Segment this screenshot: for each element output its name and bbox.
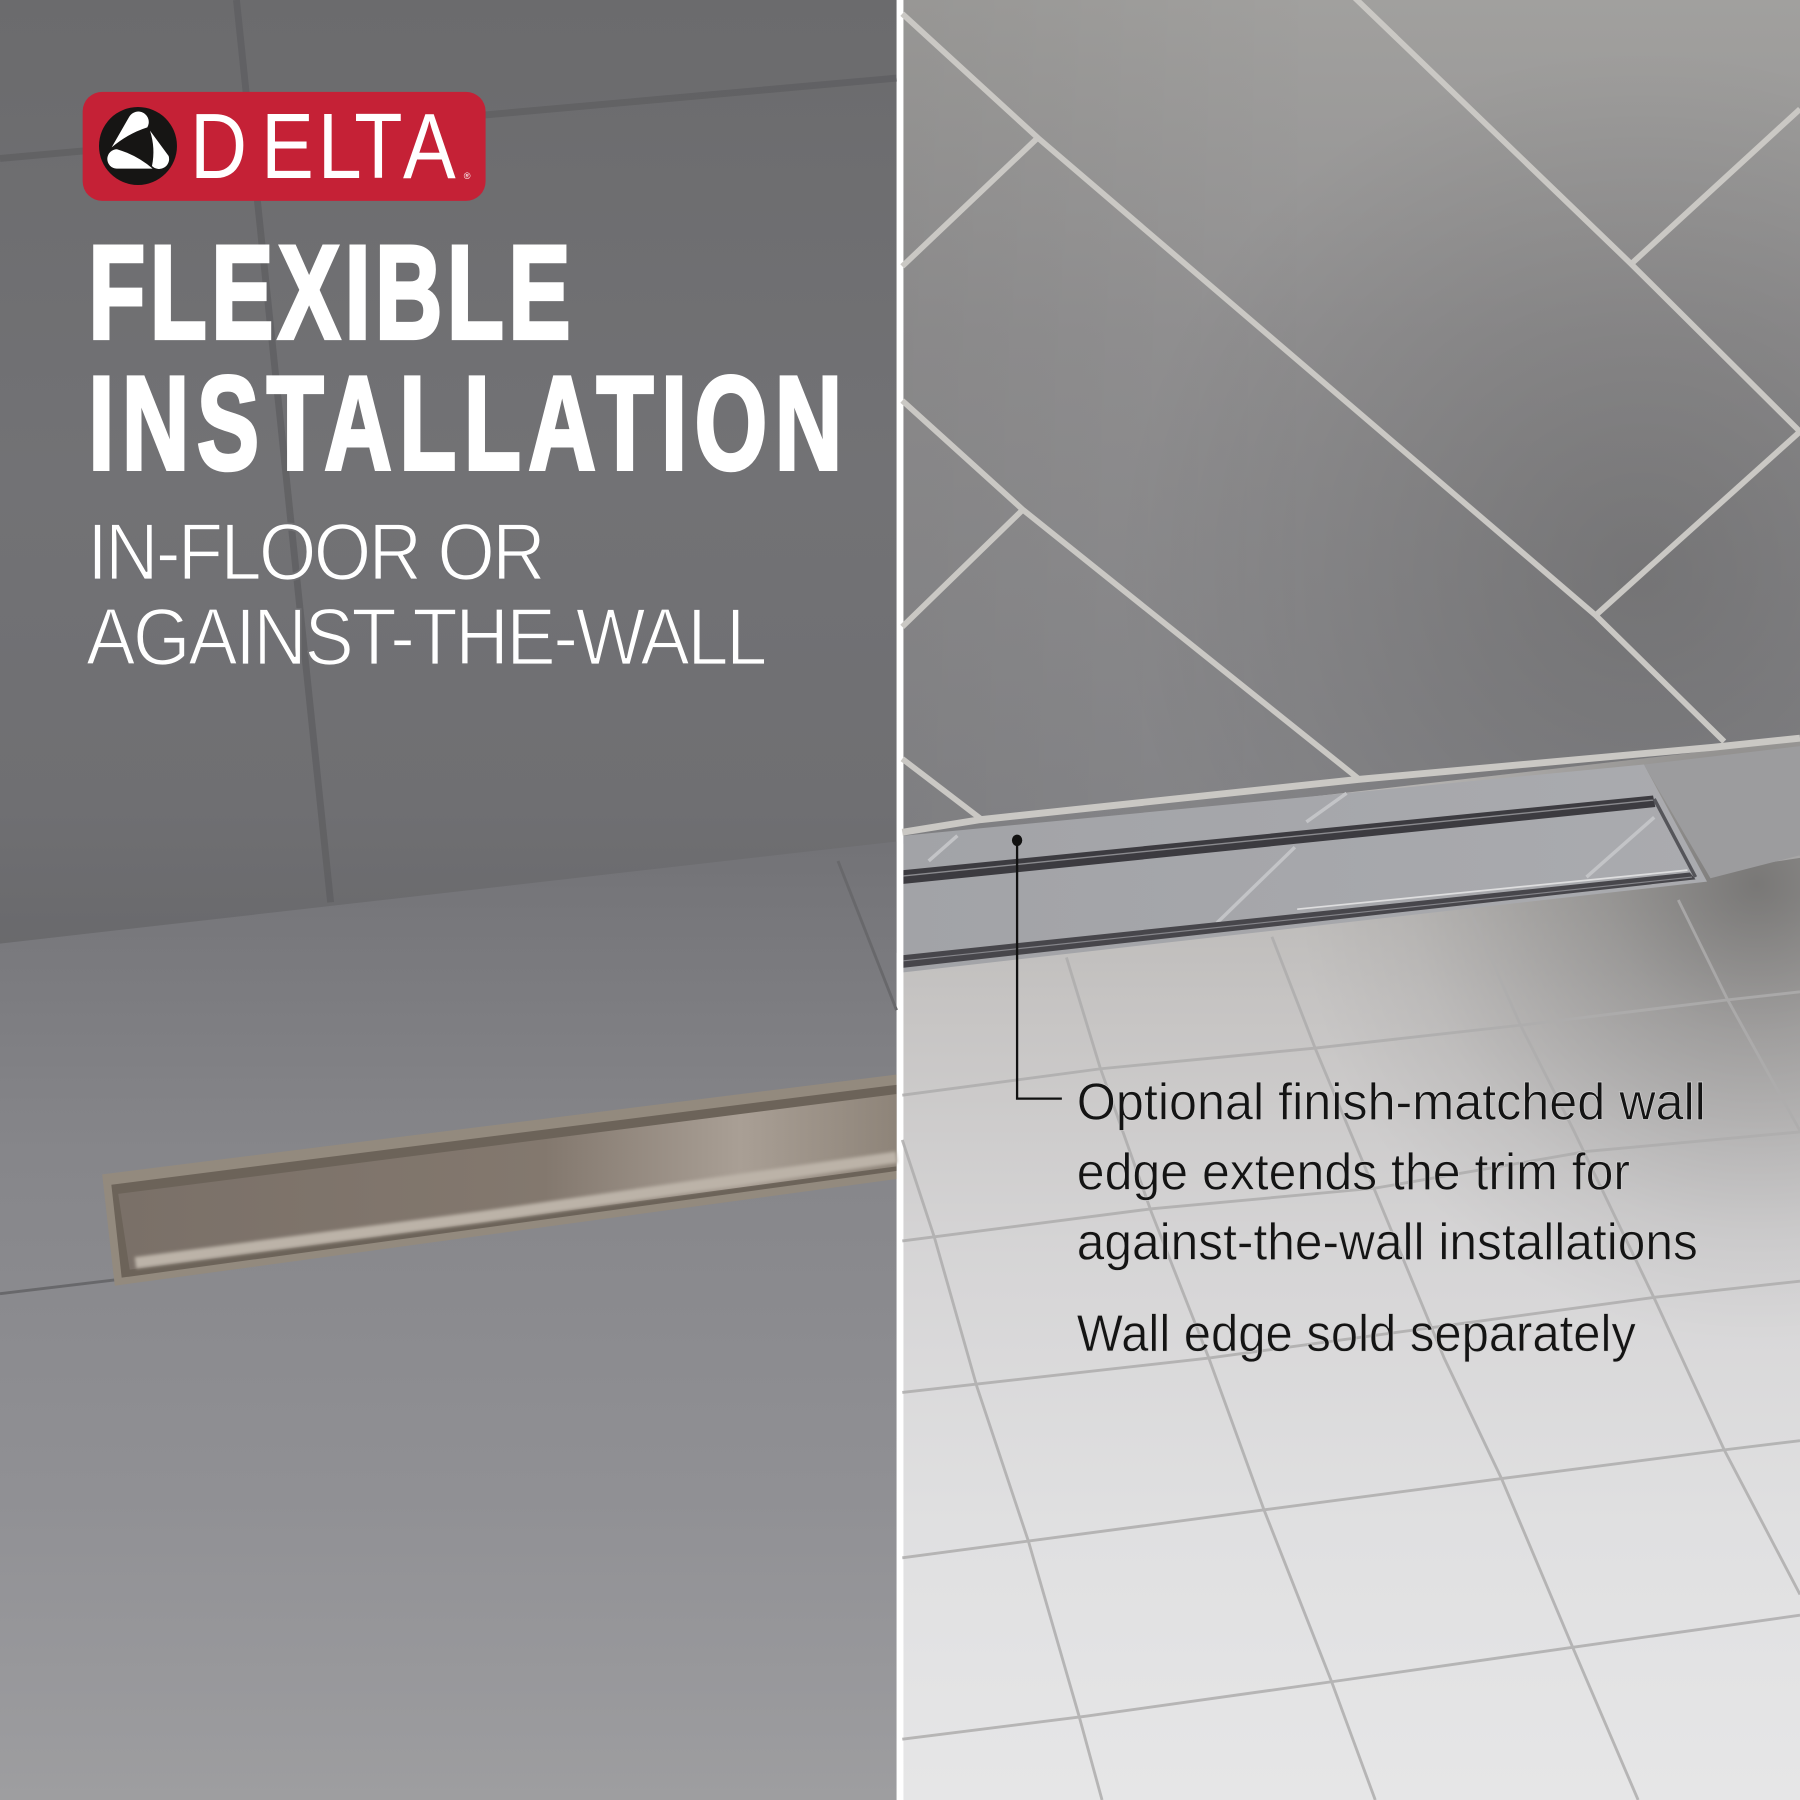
shower floor tile	[0, 841, 897, 1800]
shower wall tile	[0, 0, 897, 953]
subheading: in-floor or against-the-wall: IN-FLOOR OR	[87, 508, 546, 597]
logo emblem	[99, 107, 177, 185]
callout text: Wall edge sold separately	[1077, 1304, 1636, 1362]
panel: in-floor installation photo	[0, 0, 897, 1800]
chrome linear drain	[903, 765, 1707, 972]
callout text: Optional finish-matched wall	[1077, 1072, 1706, 1130]
grout band along wall base	[902, 738, 1800, 832]
callout text: edge extends the trim for	[1077, 1142, 1630, 1200]
callout: leader line to wall edge	[1012, 835, 1062, 1099]
floor tile grout lines	[0, 861, 897, 1294]
lower groove highlight	[903, 877, 1692, 961]
callout text: against-the-wall installations	[1077, 1212, 1698, 1270]
subheading: in-floor or against-the-wall	[86, 508, 767, 682]
drain end groove	[1654, 799, 1696, 877]
heading: Flexible Installation: INSTALLATION	[88, 350, 842, 498]
drain channel shadow	[111, 1085, 897, 1278]
drain plate	[903, 765, 1707, 972]
registered mark: ®	[464, 171, 471, 181]
heading: Flexible Installation	[88, 219, 842, 498]
heading: Flexible Installation: FLEXIBLE	[88, 219, 571, 367]
callout text	[1077, 1072, 1706, 1362]
upper groove highlight	[903, 800, 1653, 876]
wall tile grout lines	[0, 0, 897, 902]
floor base	[903, 740, 1800, 1800]
lower channel bright edge	[1297, 870, 1688, 909]
logo wordmark: DELTA	[190, 95, 456, 198]
wall grout lines	[902, 0, 1800, 818]
logo red badge	[83, 92, 486, 201]
herringbone wall tiles	[902, 0, 1800, 844]
logo: Delta	[83, 92, 486, 201]
tile faces	[903, 0, 1800, 844]
brushed nickel linear drain	[102, 1074, 897, 1286]
drain cover plate	[118, 1094, 897, 1270]
drain trim	[102, 1074, 897, 1286]
subheading: in-floor or against-the-wall: AGAINST-THE-WALL	[86, 593, 767, 682]
floor tile grout lines	[902, 856, 1800, 1800]
upper channel groove	[903, 796, 1655, 884]
cover plate highlight	[135, 1157, 897, 1263]
lower channel groove	[903, 872, 1696, 968]
neighbouring floor tile at wall	[1644, 746, 1800, 878]
panel: against-the-wall installation photo	[902, 0, 1800, 1800]
plate reflections	[929, 793, 1654, 923]
